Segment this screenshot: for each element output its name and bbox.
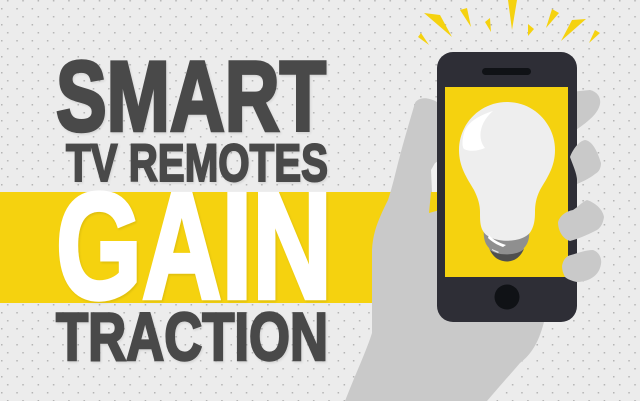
phone — [437, 52, 577, 322]
yellow band — [0, 192, 440, 303]
title line: TV REMOTES: TV REMOTES — [66, 134, 328, 193]
title line: TRACTION: TRACTION — [56, 299, 328, 375]
phone home button — [494, 284, 520, 310]
title line: GAIN: GAIN — [56, 161, 332, 330]
icon: light bulb — [459, 102, 555, 262]
icon: finger behind phone — [570, 90, 600, 134]
finger two — [570, 140, 601, 184]
finger three — [558, 200, 604, 241]
yellow notch — [429, 192, 440, 213]
base highlights — [488, 235, 506, 247]
bulb base — [484, 228, 529, 262]
title — [56, 40, 332, 375]
phone body — [437, 52, 577, 322]
thumb gap between hand and phone — [431, 160, 440, 192]
bulb highlight — [462, 111, 493, 151]
finger four — [562, 250, 601, 282]
icon: hand palm behind phone — [345, 98, 544, 401]
phone screen — [445, 87, 568, 277]
sparks above phone — [418, 0, 600, 45]
icon: fingers over phone — [558, 140, 604, 282]
phone speaker — [482, 68, 531, 75]
title line: SMART: SMART — [56, 40, 326, 152]
bulb glass — [459, 102, 555, 241]
